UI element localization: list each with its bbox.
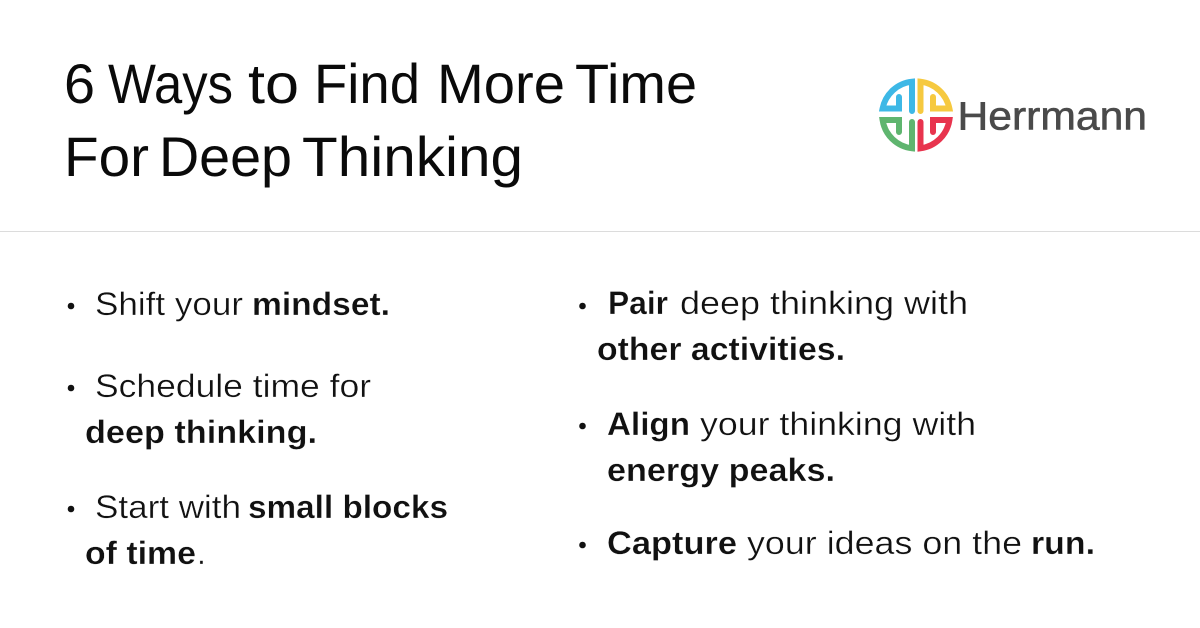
item: pair deep thinking: deep thinking with [680,285,968,321]
item: shift your mindset: mindset. [252,286,390,322]
icon: green quadrant [883,120,912,148]
item: align thinking: energy peaks. [607,452,835,488]
item: shift your mindset: Shift your [95,286,243,322]
item: small blocks: Start with [95,489,241,525]
title: For [64,125,149,188]
item: capture ideas: your ideas on the [747,525,1022,561]
title [64,52,697,188]
wordmark: Herrmann [958,94,1147,138]
icon: blue quadrant [883,82,912,111]
item: align thinking: your thinking with [700,406,976,442]
item: small blocks: small blocks [248,489,448,525]
title: More [437,52,565,115]
title: to [248,52,299,115]
title: Thinking [302,125,523,188]
item: align thinking: Align [607,406,690,442]
item: small blocks: . [197,535,206,571]
item: schedule time: deep thinking. [85,414,317,450]
item: schedule time: Schedule time for [95,368,371,404]
icon: yellow quadrant [920,82,949,111]
item: pair deep thinking [579,285,968,367]
item: small blocks: of time [85,535,196,571]
item: pair deep thinking: other activities. [597,331,845,367]
title: Ways [108,52,233,115]
item: pair deep thinking: Pair [608,285,668,321]
item: small blocks [68,489,448,571]
title: Time [575,52,697,115]
item: schedule time [68,368,371,450]
title: Find [314,52,420,115]
right list [579,285,1095,561]
item: capture ideas: Capture [607,525,737,561]
icon: red quadrant [920,120,949,148]
title: Deep [159,125,292,188]
title: 6 [64,52,95,115]
item: capture ideas [579,525,1095,561]
logo: Herrmann [883,82,1147,148]
item: capture ideas: run. [1031,525,1095,561]
item: align thinking [579,406,976,488]
left list [68,286,448,571]
item: shift your mindset [68,286,390,322]
